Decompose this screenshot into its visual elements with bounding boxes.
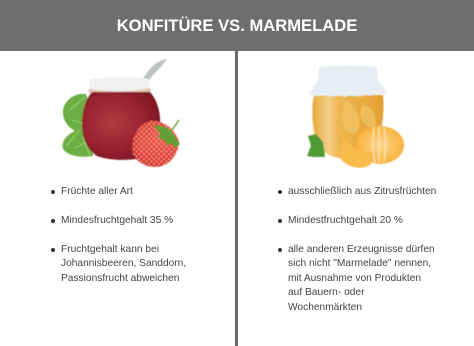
spoon [139,59,167,86]
left bullet list [51,186,186,284]
leaf [63,94,93,157]
cloth cover [309,66,387,97]
title: KONFITÜRE VS. MARMELADE [117,16,357,35]
bullet: naming rule: alle anderen Erzeugnisse dürfen [288,244,435,255]
bullet: naming rule: sich nicht "Marmelade" nennen, [288,258,431,269]
green leaf [307,134,325,157]
bullet: exceptions: Passionsfrucht abweichen [61,273,179,284]
right bullet list [278,186,436,313]
illustration: strawberry jam jar [62,58,180,168]
orange jar body [312,95,384,158]
mandarin segment [339,140,373,168]
bullet: naming rule [278,244,435,313]
bullet: exceptions: Johannisbeeren, Sanddorn, [61,258,186,269]
bullet: naming rule: auf Bauern- oder [288,287,364,298]
bullet: naming rule: mit Ausnahme von Produkten [288,273,421,284]
bullet: minimum fruit content 20: Mindestfruchtgehalt 20 % [288,215,403,226]
bullet: fruits: Früchte aller Art [61,186,133,197]
strawberry leaves [153,125,180,148]
bullet: exceptions: Fruchtgehalt kann bei [61,244,159,255]
bullet: minimum fruit content 35: Mindesfruchtgehalt 35 % [61,215,173,226]
jar body [82,92,160,160]
column divider [235,51,238,346]
strawberry body [132,121,179,167]
header band [0,0,474,51]
jar lid [88,78,150,92]
bullet: exceptions [51,244,186,284]
mandarin [356,126,404,164]
bullet: citrus only: ausschließlich aus Zitrusfrüchten [288,186,436,197]
bullet: naming rule: Wochenmärkten [288,302,362,313]
